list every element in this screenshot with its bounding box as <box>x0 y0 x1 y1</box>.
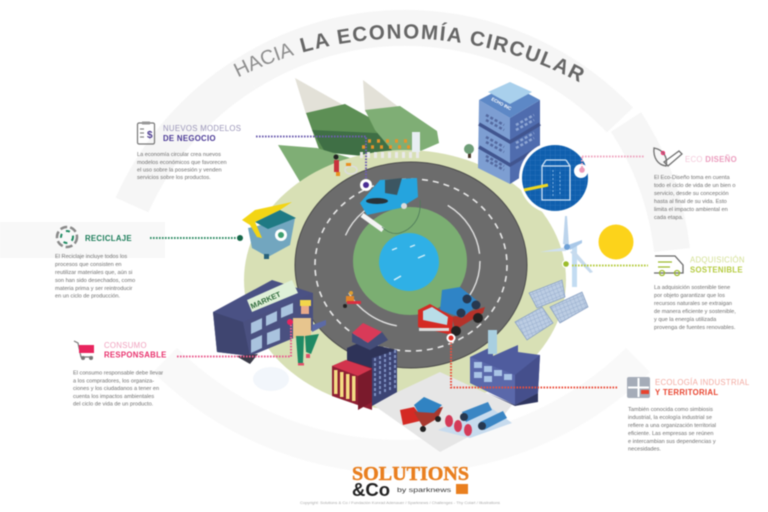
text block: El Eco-Diseño toma en cuenta <box>654 175 730 181</box>
text block: de manera eficiente y sostenible, <box>654 309 736 315</box>
icon: shopping cart <box>74 341 94 360</box>
office building <box>478 82 540 184</box>
title: LA ECONOMÍA CIRCULAR <box>299 22 584 83</box>
text block: La adquisición sostenible tiene <box>654 285 730 291</box>
text block: El Reciclaje incluye todos los <box>55 254 127 260</box>
text block: por objeto garantizar que los <box>654 293 725 299</box>
heading: ECOLOGÍA INDUSTRIAL <box>655 378 750 387</box>
text block: servicios sobre los productos. <box>137 175 211 181</box>
road <box>295 162 527 368</box>
text block: hasta al final de su vida. Esto <box>654 199 727 205</box>
tree <box>464 144 474 158</box>
copyright: Copyright: Solutions & Co / Fundación Konrad Adenauer / Sparknews / Challenges - Thy Colart / Illustrations <box>300 501 500 505</box>
panel: consumo responsable <box>73 341 167 408</box>
sun <box>598 224 634 260</box>
market building <box>213 280 313 364</box>
text block: provenga de fuentes renovables. <box>654 325 736 331</box>
text block: el uso sobre la posesión y venden <box>137 168 222 174</box>
panel: adquisición sostenible <box>654 256 745 331</box>
text block: todo el ciclo de vida de un bien o <box>654 183 735 189</box>
logo <box>352 464 469 500</box>
small truck and pipes <box>400 397 512 438</box>
icon: clipboard dollar: $ <box>147 130 153 141</box>
mountains <box>278 78 439 187</box>
market building: MARKET <box>249 289 283 311</box>
text block: El consumo responsable debe llevar <box>73 370 163 376</box>
red building <box>332 360 372 410</box>
shadow smudge <box>253 367 289 391</box>
text block: modelos económicos que favorecen <box>137 160 227 166</box>
text block: eficiente. Las empresas se reúnen <box>628 431 714 437</box>
text block: en un ciclo de producción. <box>55 294 120 300</box>
text block <box>55 254 135 300</box>
central green <box>353 207 467 315</box>
text block: necesidades. <box>628 446 661 452</box>
text block: La economía circular crea nuevos <box>137 152 221 158</box>
gray platform <box>372 372 512 452</box>
icon: truck <box>654 256 683 276</box>
text block: reutilizar materiales que, aún si <box>55 270 132 276</box>
text block <box>628 407 716 452</box>
heading: CONSUMO <box>104 341 147 350</box>
text block: e intercambian sus dependencias y <box>628 439 716 445</box>
background rings <box>0 28 672 457</box>
text block: del ciclo de vida de un producto. <box>73 402 154 408</box>
text block: a los compradores, los organiza- <box>73 378 154 384</box>
solar panels <box>515 280 588 340</box>
text block: recursos naturales se extraigan <box>654 301 732 307</box>
logo: by sparknews <box>397 487 452 494</box>
scooter rider <box>343 291 361 308</box>
text block <box>654 285 736 331</box>
text block: También conocida como simbiosis <box>628 407 713 413</box>
cyclist and bike rack <box>334 132 420 176</box>
recycling bin <box>242 202 296 259</box>
wind turbines <box>540 216 593 287</box>
panel: ecología industrial y territorial <box>627 377 750 452</box>
dark tower <box>347 323 397 406</box>
logo: &Co <box>352 480 390 500</box>
panel: consumo responsable: RESPONSABLE <box>104 350 167 360</box>
heading: NUEVOS MODELOS <box>163 124 241 133</box>
shopper <box>293 300 326 366</box>
heading: RECICLAJE <box>85 234 132 243</box>
panel: eco diseño <box>654 148 737 221</box>
leader lines <box>150 136 648 388</box>
text block: son han sido desechados, como <box>55 278 135 284</box>
icon: leaf and pencil <box>654 148 682 166</box>
heading: ECO DISEÑO <box>685 155 737 164</box>
text block: servicio, desde su concepción <box>654 191 729 197</box>
text block <box>654 175 735 221</box>
panel: reciclaje <box>55 227 135 300</box>
blueprint circle <box>519 142 591 214</box>
icon: puzzle <box>627 377 650 398</box>
text block: cuenta los impactos ambientales <box>73 394 154 400</box>
ground <box>244 150 566 410</box>
panel: adquisición sostenible: SOSTENIBLE <box>690 266 743 274</box>
factory <box>470 330 540 406</box>
text block: y que la energía utilizada <box>654 317 717 323</box>
text block <box>137 152 227 181</box>
water <box>379 233 439 291</box>
title: HACIA <box>233 43 295 78</box>
text block: procesos que consisten en <box>55 262 122 268</box>
text block: cada etapa. <box>654 215 684 221</box>
heading: ADQUISICIÓN <box>690 256 745 264</box>
red truck <box>418 287 485 336</box>
panel: nuevos modelos de negocio <box>137 122 241 181</box>
icon: recycle <box>57 227 77 247</box>
text block: materia prima y ser reintroducir <box>55 286 133 292</box>
panel: ecología industrial y territorial: Y TERRITORIAL <box>655 388 718 397</box>
electric car <box>360 178 420 234</box>
text block <box>73 370 163 408</box>
text block: refiere a una organización territorial <box>628 423 716 429</box>
text block: limita el impacto ambiental en <box>654 207 728 213</box>
panel: nuevos modelos de negocio: DE NEGOCIO <box>163 134 216 143</box>
text block: ciones y los ciudadanos a tener en <box>73 386 159 392</box>
logo: SOLUTIONS <box>352 464 469 485</box>
office building: ECHO INC <box>491 96 513 112</box>
text block: industrial, la ecología industrial se <box>628 415 712 421</box>
